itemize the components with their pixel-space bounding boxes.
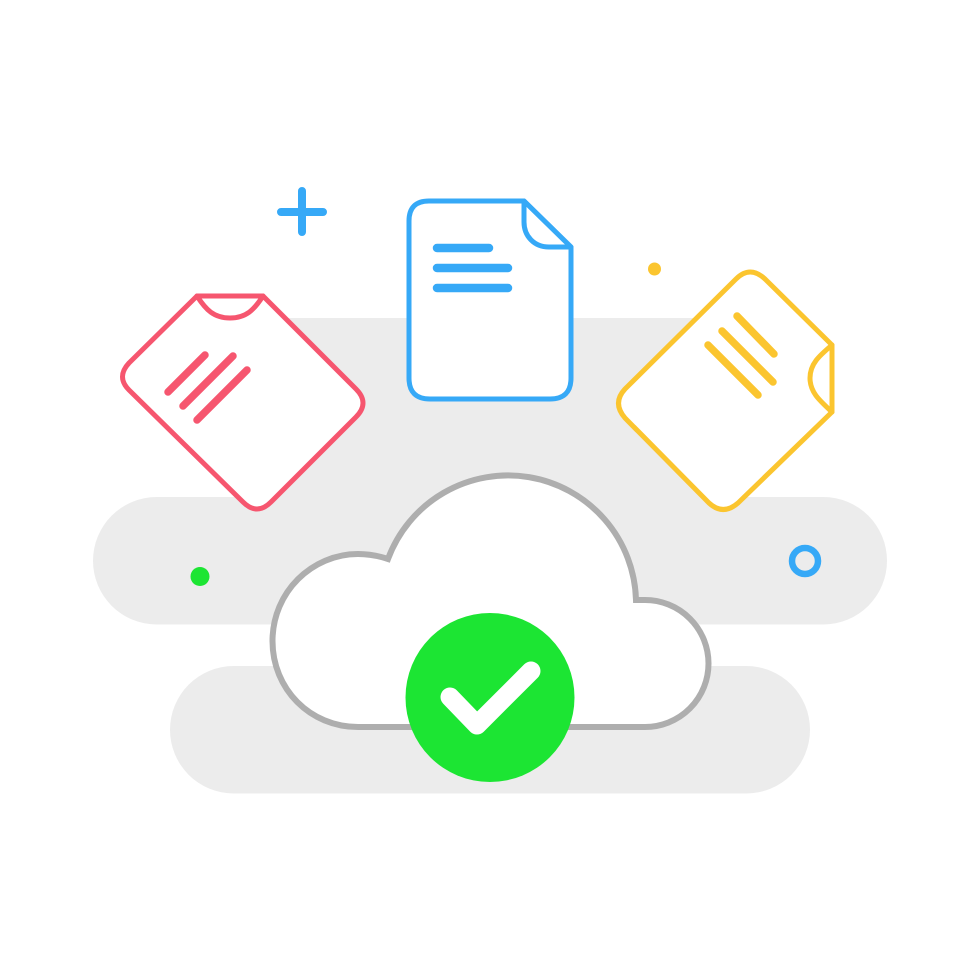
icon: green dot	[190, 567, 210, 586]
icon: yellow document	[618, 272, 832, 510]
icon: small yellow dot	[648, 262, 661, 276]
icon: cloud	[272, 475, 708, 727]
icon: blue ring	[792, 548, 818, 574]
icon: red document	[122, 296, 363, 509]
icon: blue plus	[281, 191, 323, 232]
icon: blue document	[409, 201, 571, 399]
background: grey rounded blobs	[93, 318, 887, 794]
icon: green check badge	[406, 613, 574, 782]
